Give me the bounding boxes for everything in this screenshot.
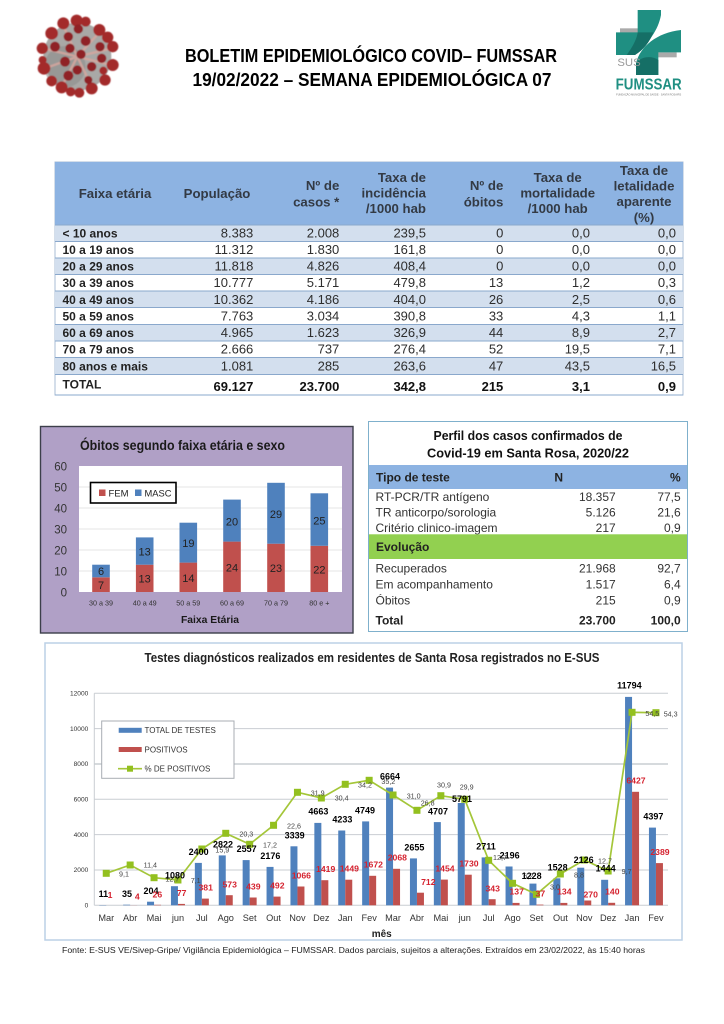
table: faixa etária: [55, 162, 683, 395]
total labels: 2400: [189, 847, 209, 857]
table rows: 19,5: [565, 342, 590, 356]
chart heading: Óbitos segundo faixa etária e sexo: [80, 438, 285, 453]
table rows: 26: [489, 292, 503, 307]
total labels: 2557: [237, 844, 257, 854]
month labels: jun: [171, 913, 184, 923]
total labels: 4749: [355, 805, 375, 815]
y axis labels: 40: [54, 504, 67, 516]
percentage labels: 34,2: [358, 781, 372, 789]
percentage labels: 12,7: [598, 857, 612, 865]
bars: total de testes: [99, 697, 656, 905]
section: tipo de teste: 18.357: [579, 490, 616, 504]
total row: Total: [376, 614, 403, 628]
positive labels: 1449: [340, 863, 359, 873]
section: tipo de teste: [369, 465, 687, 535]
positive labels: 2068: [388, 853, 407, 863]
table rows: 13: [489, 275, 503, 290]
section: evolução: 0,9: [664, 594, 681, 608]
table rows: 0,0: [658, 242, 676, 257]
positive labels: 1454: [435, 864, 455, 874]
month labels: Fev: [648, 913, 664, 923]
table rows: 43,5: [565, 358, 590, 373]
percentage labels: 9,7: [622, 868, 632, 876]
total labels: 2176: [260, 851, 280, 861]
y axis labels: 2000: [74, 867, 89, 874]
stacked bars: MASC: [92, 483, 328, 577]
section: tipo de teste: 0,9: [664, 521, 681, 535]
x axis labels: 60 a 69: [220, 598, 244, 608]
percentage labels: 3,0: [550, 884, 560, 892]
table rows: 4.826: [307, 258, 339, 274]
section: evolução: Em acompanhamento: [376, 578, 493, 592]
x axis labels: 80 e +: [309, 598, 329, 608]
total labels: 6664: [380, 772, 400, 782]
table rows: 2.008: [307, 226, 339, 240]
total labels: 1528: [548, 862, 568, 872]
table rows: 285: [318, 358, 339, 373]
section: tipo de teste: RT-PCR/TR antígeno: [376, 490, 490, 504]
section: evolução: Evolução: [376, 540, 429, 554]
total labels: 1080: [165, 870, 185, 880]
y axis labels: [70, 690, 89, 910]
table rows: 7,1: [658, 342, 676, 356]
percentage labels: 12,7: [165, 876, 179, 884]
table rows: 80 anos e mais: [62, 359, 148, 373]
table rows: 20 a 29 anos: [62, 260, 134, 274]
y axis labels: 0: [85, 902, 89, 910]
table rows: 326,9: [393, 325, 426, 340]
table header: Taxa de: [534, 170, 582, 185]
bar value labels: 7: [98, 580, 104, 592]
plot area: [79, 466, 342, 592]
table rows: 4,3: [572, 308, 590, 324]
bar value labels: 20: [226, 517, 238, 529]
table header: (%): [634, 210, 654, 225]
panel heading: [427, 428, 629, 460]
table rows: 1,1: [658, 308, 676, 324]
table rows: 408,4: [393, 258, 426, 274]
percentage labels: 54,5: [645, 710, 659, 718]
panel heading: Perfil dos casos confirmados de: [434, 428, 622, 443]
positive labels: 37: [536, 889, 545, 899]
percentage labels: 30,4: [335, 795, 349, 803]
table rows: 0,0: [658, 226, 676, 240]
bar value labels: 24: [226, 563, 238, 575]
month labels: [98, 913, 664, 923]
section: evolução: Recuperados: [376, 562, 447, 576]
percentage labels: 9,1: [119, 870, 129, 878]
month labels: Abr: [410, 913, 424, 923]
table rows: 1.623: [307, 325, 339, 340]
table rows: 2.666: [221, 342, 253, 356]
table rows: 60 a 69 anos: [62, 326, 134, 340]
x axis labels: 40 a 49: [133, 598, 157, 608]
table rows: 239,5: [393, 226, 426, 240]
table total row: [62, 378, 676, 394]
percentage labels: 8,8: [574, 871, 584, 879]
table rows: 2,5: [572, 292, 590, 307]
table rows: 50 a 59 anos: [62, 310, 134, 324]
table total row: 69.127: [214, 379, 253, 394]
table rows: 737: [318, 342, 339, 356]
legend: FEM: [108, 488, 129, 500]
table total row: 3,1: [572, 379, 590, 394]
legend: MASC: [144, 488, 172, 500]
month labels: Out: [266, 913, 281, 923]
total row: 23.700: [579, 614, 616, 628]
positive labels: 77: [177, 888, 187, 898]
positive labels: 1066: [292, 871, 311, 881]
section: tipo de teste: 21,6: [657, 506, 681, 520]
table rows: 0,3: [658, 275, 676, 290]
section: evolução: 1.517: [586, 578, 616, 592]
table rows: 8.383: [221, 226, 253, 240]
percentage labels: 54,3: [664, 710, 678, 718]
percentage labels: 26,8: [421, 799, 435, 807]
table rows: 10.362: [214, 292, 253, 307]
table rows: 0,6: [658, 292, 676, 307]
table rows: 0: [496, 226, 503, 240]
section: tipo de teste: 5.126: [586, 506, 616, 520]
panel heading: Covid-19 em Santa Rosa, 2020/22: [427, 446, 629, 460]
table rows: 263,6: [393, 358, 426, 373]
positive labels: 1672: [364, 860, 383, 870]
total row: 100,0: [651, 614, 681, 628]
positive labels: 26: [153, 889, 162, 899]
table header: mortalidade: [520, 186, 595, 200]
month labels: Dez: [313, 913, 330, 923]
month labels: Nov: [576, 913, 593, 923]
x axis title: Faixa Etária: [181, 614, 239, 626]
month labels: Out: [553, 913, 568, 923]
bar value labels: [98, 509, 325, 592]
percentage labels: 15,9: [215, 846, 229, 854]
legend: [102, 721, 234, 778]
table rows: 0,0: [572, 258, 590, 274]
logo: FUMSSAR: FUNDAÇÃO MUNICIPAL DE SAÚDE · SANTA ROSA/RS: [616, 91, 681, 96]
table rows: 0: [496, 242, 503, 257]
percentage labels: 17,2: [263, 842, 277, 850]
percentage labels: [119, 710, 678, 892]
legend: % DE POSITIVOS: [144, 764, 210, 774]
y axis labels: 4000: [74, 832, 89, 839]
total labels: 35: [122, 889, 132, 899]
month labels: Mar: [98, 913, 114, 923]
table rows: 11.818: [215, 258, 253, 274]
month labels: Nov: [289, 913, 306, 923]
positive labels: 2389: [650, 847, 670, 857]
table rows: 30 a 39 anos: [62, 276, 134, 290]
positive labels: 1419: [316, 864, 335, 874]
table total row: 0,9: [658, 379, 676, 394]
positive labels: 137: [509, 887, 524, 897]
table header: População: [184, 186, 250, 201]
panel: testes diagnósticos: [45, 643, 682, 940]
percentage labels: 30,9: [437, 782, 451, 790]
section: evolução: 6,4: [664, 578, 681, 592]
y axis labels: 8000: [74, 761, 89, 768]
bar value labels: 22: [313, 565, 325, 577]
positive labels: 270: [583, 889, 598, 899]
month labels: Jan: [338, 913, 353, 923]
month labels: Dez: [600, 913, 617, 923]
logo: FUMSSAR: FUMSSAR: [616, 76, 682, 93]
title: BOLETIM EPIDEMIOLÓGICO COVID– FUMSSAR: [185, 45, 557, 66]
bar value labels: 25: [313, 515, 325, 527]
table rows: 479,8: [393, 275, 426, 290]
line: % de positivos: [103, 709, 659, 898]
table header: Nº de: [470, 178, 503, 193]
y axis labels: 12000: [70, 690, 89, 698]
month labels: Set: [530, 913, 544, 923]
y axis labels: 10000: [70, 726, 89, 733]
total labels: [99, 680, 663, 899]
positive labels: 140: [605, 887, 620, 897]
table rows: 0,0: [572, 242, 590, 257]
x axis labels: 30 a 39: [89, 598, 113, 608]
bar value labels: 13: [139, 546, 151, 558]
x axis labels: [89, 598, 329, 608]
bar value labels: 19: [182, 538, 194, 550]
positive labels: 492: [270, 881, 285, 891]
table rows: 47: [489, 358, 503, 373]
table rows: [62, 226, 676, 373]
section: evolução: 21.968: [579, 562, 616, 576]
table rows: 1.830: [307, 242, 339, 257]
bar value labels: 14: [182, 573, 194, 585]
month labels: Ago: [218, 913, 234, 923]
table total row: 342,8: [393, 379, 426, 394]
section: tipo de teste: 217: [596, 521, 616, 535]
y axis labels: 6000: [74, 796, 89, 804]
total labels: 204: [143, 886, 158, 896]
percentage labels: 35,2: [381, 778, 395, 786]
month labels: Mai: [147, 913, 161, 923]
table rows: 2,7: [658, 325, 676, 340]
x axis labels: 50 a 59: [176, 598, 200, 608]
total labels: 2196: [500, 850, 520, 860]
table rows: 33: [489, 308, 503, 324]
table rows: 0,0: [658, 258, 676, 274]
total labels: 2655: [404, 842, 424, 852]
section: evolução: 92,7: [657, 562, 681, 576]
percentage labels: 7,1: [191, 877, 201, 885]
table header: incidência: [362, 186, 427, 200]
total labels: 11794: [617, 680, 642, 690]
table header: [79, 163, 674, 225]
percentage labels: 6,2: [523, 872, 533, 880]
section: evolução: 215: [596, 594, 616, 608]
y axis labels: 30: [54, 524, 67, 536]
table rows: 8,9: [572, 325, 590, 340]
month labels: Set: [243, 913, 257, 923]
table header: Faixa etária: [79, 186, 152, 201]
table rows: 44: [489, 325, 503, 340]
table rows: 52: [489, 342, 503, 356]
table header: letalidade: [614, 178, 674, 194]
title: [185, 45, 557, 90]
legend: TOTAL DE TESTES: [144, 726, 216, 735]
y axis labels: 20: [54, 546, 67, 558]
total labels: 1228: [522, 871, 542, 881]
positive labels: 712: [421, 877, 436, 887]
total labels: 2822: [213, 840, 233, 850]
positive labels: 4: [135, 892, 140, 902]
section: tipo de teste: N: [554, 470, 563, 484]
month labels: Jul: [483, 913, 495, 923]
section: tipo de teste: Tipo de teste: [376, 470, 450, 484]
percentage labels: 31,9: [311, 789, 325, 797]
stacked bars: FEM: [92, 542, 328, 592]
section: tipo de teste: %: [670, 470, 681, 484]
legend: [90, 482, 176, 503]
title: 19/02/2022 – SEMANA EPIDEMIOLÓGICA 07: [192, 69, 552, 90]
bar value labels: 29: [270, 509, 282, 521]
month labels: Mai: [433, 913, 448, 923]
table rows: 16,5: [651, 358, 676, 373]
table header: Nº de: [306, 178, 339, 193]
percentage labels: 20,3: [239, 830, 253, 838]
table rows: 1,2: [572, 275, 590, 290]
positive labels: 134: [557, 887, 572, 897]
table rows: 4.186: [307, 292, 339, 307]
table rows: < 10 anos: [62, 226, 118, 240]
month labels: Ago: [504, 913, 521, 923]
bar value labels: 23: [270, 563, 282, 575]
table header: /1000 hab: [366, 201, 426, 216]
total labels: 4707: [428, 806, 448, 816]
positive labels: 1: [108, 890, 113, 900]
table rows: 40 a 49 anos: [62, 293, 134, 307]
footer source note: Fonte: E-SUS VE/Sivep-Gripe/ Vigilância Epidemiológica – FUMSSAR. Dados parciais, sujeitos a alterações. Extraídos em 23/02/2022, às 15:40 horas: [62, 945, 645, 955]
month labels: Mar: [385, 913, 401, 923]
total labels: 4233: [332, 815, 352, 825]
total labels: 11: [99, 889, 108, 899]
table rows: 0,0: [572, 226, 590, 240]
positive labels: 6427: [626, 776, 646, 786]
logo: FUMSSAR: SUS: [617, 57, 641, 69]
positive labels: 343: [485, 883, 500, 893]
table rows: 3.034: [307, 308, 339, 324]
table header: Taxa de: [620, 163, 668, 178]
month labels: Jan: [625, 913, 639, 923]
table rows: 10 a 19 anos: [62, 243, 134, 257]
total row: [376, 614, 681, 628]
total labels: 3339: [285, 830, 305, 840]
positive labels: 1730: [459, 859, 479, 869]
positive labels: [108, 776, 670, 902]
month labels: Jul: [196, 913, 208, 923]
bars: positivos: [130, 792, 663, 905]
percentage labels: 11,4: [144, 862, 157, 870]
table header: óbitos: [464, 194, 503, 210]
table rows: 70 a 79 anos: [62, 342, 134, 356]
percentage labels: 12,7: [493, 854, 507, 862]
total labels: 4397: [643, 812, 663, 822]
table rows: 5.171: [307, 275, 339, 290]
total labels: 5791: [452, 794, 472, 804]
table header: /1000 hab: [528, 201, 588, 216]
y axis labels: 0: [61, 588, 67, 600]
positive labels: 439: [246, 882, 261, 892]
table rows: 7.763: [221, 308, 253, 324]
panel: óbitos segundo faixa etária e sexo: [40, 426, 353, 633]
table rows: 4.965: [221, 325, 253, 340]
table total row: 215: [482, 379, 503, 394]
percentage labels: 22,6: [287, 823, 301, 831]
total labels: 1444: [596, 863, 616, 873]
table header: casos *: [293, 194, 340, 210]
table rows: 161,8: [393, 242, 426, 257]
positive labels: 573: [222, 879, 237, 889]
logo: FUMSSAR: [616, 10, 682, 96]
table rows: 10.777: [214, 275, 253, 290]
table rows: 1.081: [221, 358, 253, 373]
chart heading: Testes diagnósticos realizados em residentes de Santa Rosa registrados no E-SUS: [144, 651, 600, 665]
section: evolução: Óbitos: [376, 592, 410, 608]
total labels: 2126: [574, 855, 594, 865]
bar value labels: 13: [139, 574, 151, 586]
section: evolução: [369, 534, 687, 608]
positive labels: 381: [198, 882, 213, 892]
legend: POSITIVOS: [144, 746, 188, 754]
section: tipo de teste: Critério clinico-imagem: [376, 521, 498, 535]
percentage labels: 31,0: [407, 793, 421, 801]
percentage labels: 29,9: [460, 784, 474, 792]
total labels: 4663: [308, 807, 328, 817]
table rows: 390,8: [393, 308, 426, 324]
panel: perfil dos casos confirmados: [368, 422, 688, 632]
section: tipo de teste: TR anticorpo/sorologia: [376, 506, 497, 520]
month labels: Abr: [123, 913, 137, 923]
y axis labels: [54, 462, 67, 600]
total labels: 2711: [476, 841, 496, 851]
table rows: 11.312: [215, 242, 253, 257]
table rows: 276,4: [393, 342, 426, 356]
table total row: 23.700: [300, 379, 339, 394]
table header: aparente: [617, 194, 671, 209]
y axis labels: 60: [54, 462, 67, 474]
bar value labels: 6: [98, 566, 104, 578]
x axis title: mês: [372, 929, 392, 940]
x axis labels: 70 a 79: [264, 598, 288, 608]
icon: coronavirus: [37, 15, 119, 98]
table rows: 404,0: [393, 292, 426, 307]
table total row: TOTAL: [62, 378, 101, 392]
month labels: Fev: [361, 913, 377, 923]
y axis labels: 10: [54, 566, 67, 578]
section: tipo de teste: 77,5: [657, 490, 681, 504]
month labels: jun: [458, 913, 471, 923]
table rows: 0: [496, 258, 503, 274]
y axis labels: 50: [54, 482, 67, 494]
table header: Taxa de: [378, 170, 426, 185]
